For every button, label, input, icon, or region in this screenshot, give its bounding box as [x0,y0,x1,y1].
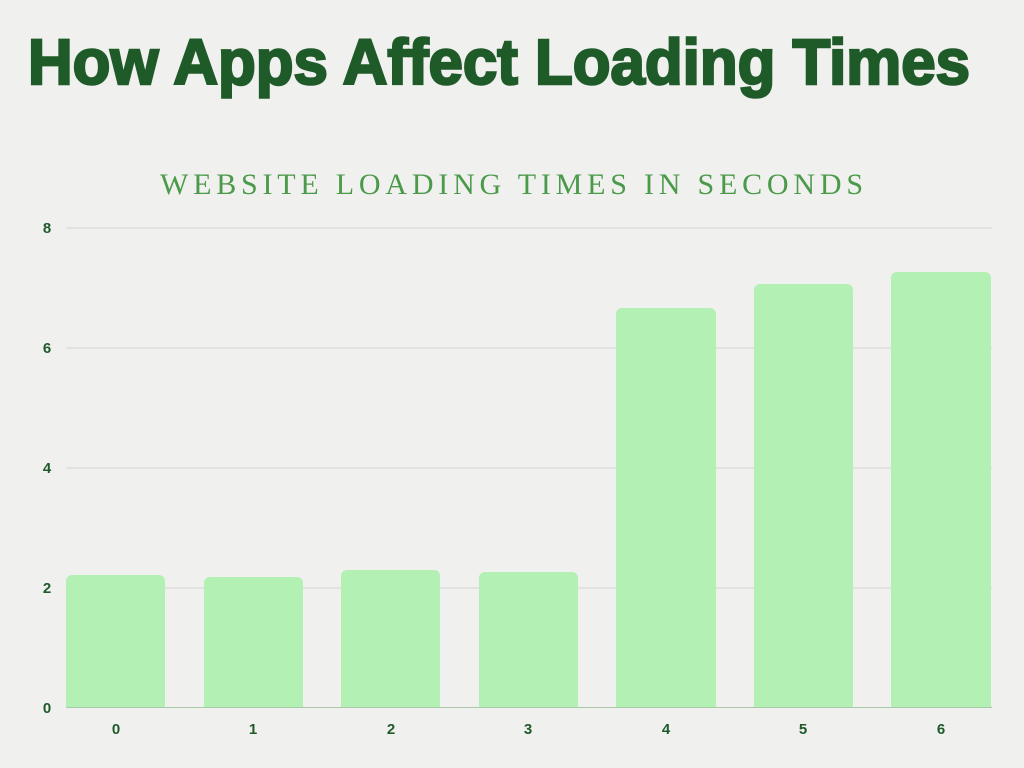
y axis labels: 0 [43,700,51,717]
x axis labels: 4 [662,721,671,738]
y axis labels: 2 [43,580,51,597]
subtitle: WEBSITE LOADING TIMES IN SECONDS [160,168,866,201]
x axis labels: 6 [937,721,945,738]
x axis labels: 0 [112,721,120,738]
bar chart [43,220,1000,738]
y axis labels [43,220,52,717]
y axis labels: 6 [43,340,51,357]
x axis labels: 3 [524,721,532,738]
x axis labels [112,721,945,738]
x axis labels: 1 [249,721,257,738]
bars [66,272,991,715]
title: How Apps Affect Loading Times [28,26,970,98]
x axis labels: 2 [387,721,395,738]
x axis labels: 5 [799,721,807,738]
y axis labels: 4 [43,460,52,477]
y axis labels: 8 [43,220,51,237]
